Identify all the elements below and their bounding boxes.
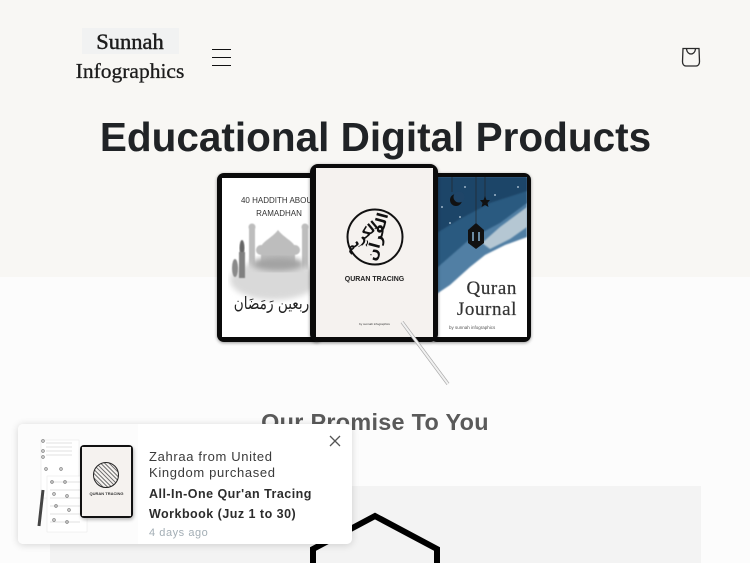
stylus <box>400 321 450 385</box>
product tablets <box>215 162 533 385</box>
notification product name <box>149 487 312 520</box>
notification product name: Workbook (Juz 1 to 30) <box>149 506 296 520</box>
icon: cart bag <box>682 48 700 67</box>
calligraphy emblem: القرآن <box>362 211 392 263</box>
tablet heading: 40 HADDITH ABOUT <box>241 196 317 205</box>
journal title <box>457 278 517 320</box>
thumbnail emblem <box>93 462 119 488</box>
journal title: Journal <box>457 299 517 320</box>
logo highlight <box>82 28 179 54</box>
thumbnail label: QURAN TRACING <box>90 491 124 496</box>
tablet screen <box>316 168 433 337</box>
tablet credit: by sunnah infographics <box>359 322 390 326</box>
product thumbnail <box>18 424 138 544</box>
tablet heading <box>241 196 317 218</box>
tablet screen <box>430 177 527 337</box>
notification time: 4 days ago <box>149 527 208 539</box>
calligraphy emblem <box>346 208 404 266</box>
logo line two: Infographics <box>76 59 184 83</box>
thumbnail screen <box>82 447 131 516</box>
logo <box>76 29 184 83</box>
logo line one: Sunnah <box>96 29 164 54</box>
tablet: Quran Journal <box>430 173 531 342</box>
title: Educational Digital Products <box>100 114 651 160</box>
journal credit: by sunnah infographics <box>449 325 495 330</box>
tablet: 40 Haddith <box>217 173 322 342</box>
mosque illustration <box>228 223 310 302</box>
watercolor sky <box>438 177 527 294</box>
icon: close <box>330 436 340 446</box>
notification product name: All-In-One Qur'an Tracing <box>149 487 312 501</box>
hero background <box>0 0 750 277</box>
icon: menu <box>212 49 231 66</box>
journal title: Quran <box>467 278 517 299</box>
purchase notification <box>18 424 352 544</box>
worksheet pages <box>38 439 88 532</box>
section heading: Our Promise To You <box>261 409 489 435</box>
tablet screen <box>222 178 322 337</box>
tablet heading: QURAN TRACING <box>345 276 404 283</box>
arabic title: أربعين رَمَضَان <box>234 294 313 314</box>
notification buyer text <box>149 449 276 480</box>
thumbnail tablet <box>80 445 133 518</box>
tablet: Quran Tracing <box>310 164 438 342</box>
tablet heading: RAMADHAN <box>256 209 302 218</box>
notification buyer text: Kingdom purchased <box>149 465 276 480</box>
hexagon icon <box>310 512 440 563</box>
promise panel <box>50 486 701 563</box>
notification buyer text: Zahraa from United <box>149 449 273 464</box>
